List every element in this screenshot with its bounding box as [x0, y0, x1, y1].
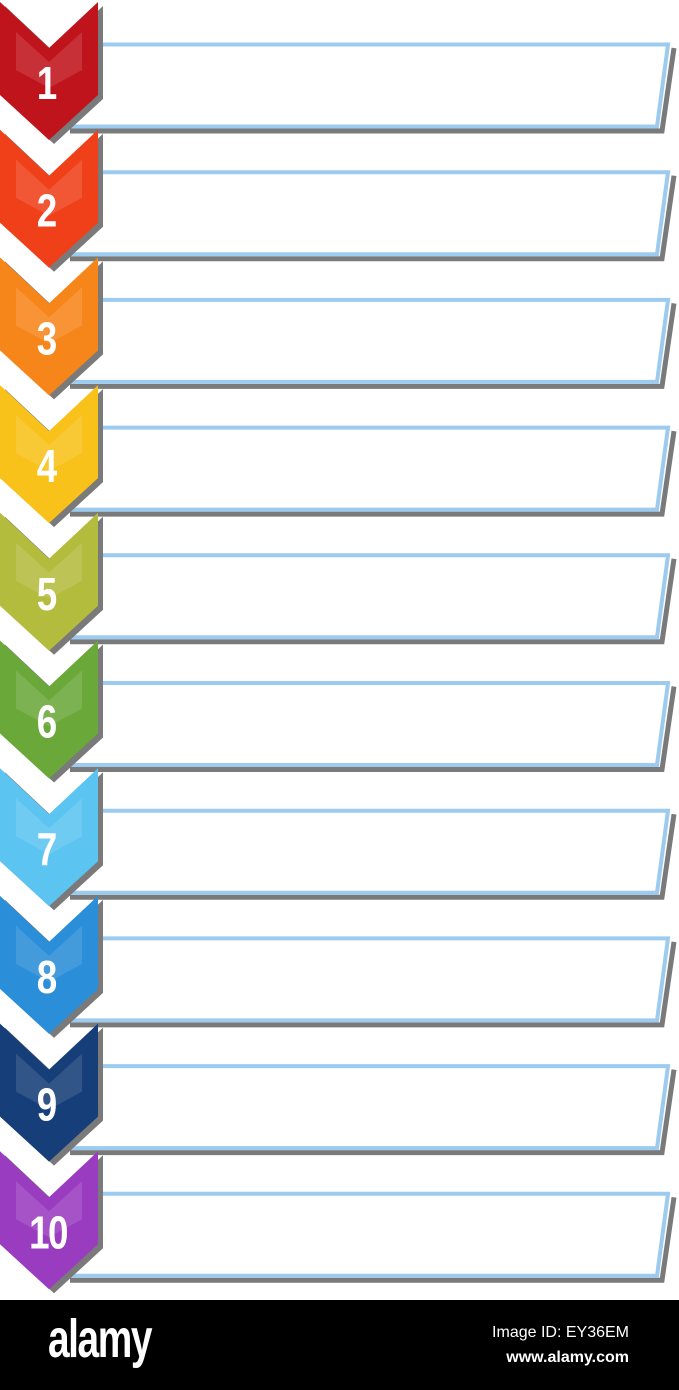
row 1: 1 [37, 57, 57, 109]
row 7 [0, 768, 674, 910]
row 8: 8 [37, 951, 57, 1003]
row 10 [0, 1151, 674, 1293]
row 6 [0, 640, 674, 782]
row 3 [0, 257, 674, 399]
row 7: 7 [37, 823, 57, 875]
row 5 [0, 513, 674, 655]
footer bar [0, 1300, 679, 1390]
row 3: 3 [37, 312, 57, 364]
footer image id: www.alamy.com [506, 1349, 629, 1366]
footer image id: Image ID: EY36EM [492, 1324, 629, 1341]
footer logo: alamy [48, 1309, 151, 1369]
row 6: 6 [37, 696, 57, 747]
row 8 [0, 896, 674, 1038]
row 5: 5 [37, 568, 57, 620]
row 4 [0, 385, 674, 527]
row 9: 9 [37, 1079, 57, 1131]
row 4: 4 [37, 440, 57, 492]
row 9 [0, 1024, 674, 1166]
row 1 [0, 2, 674, 144]
row 2: 2 [37, 185, 57, 237]
row 2 [0, 130, 674, 272]
row 10: 10 [29, 1206, 67, 1258]
footer image id [492, 1324, 629, 1366]
